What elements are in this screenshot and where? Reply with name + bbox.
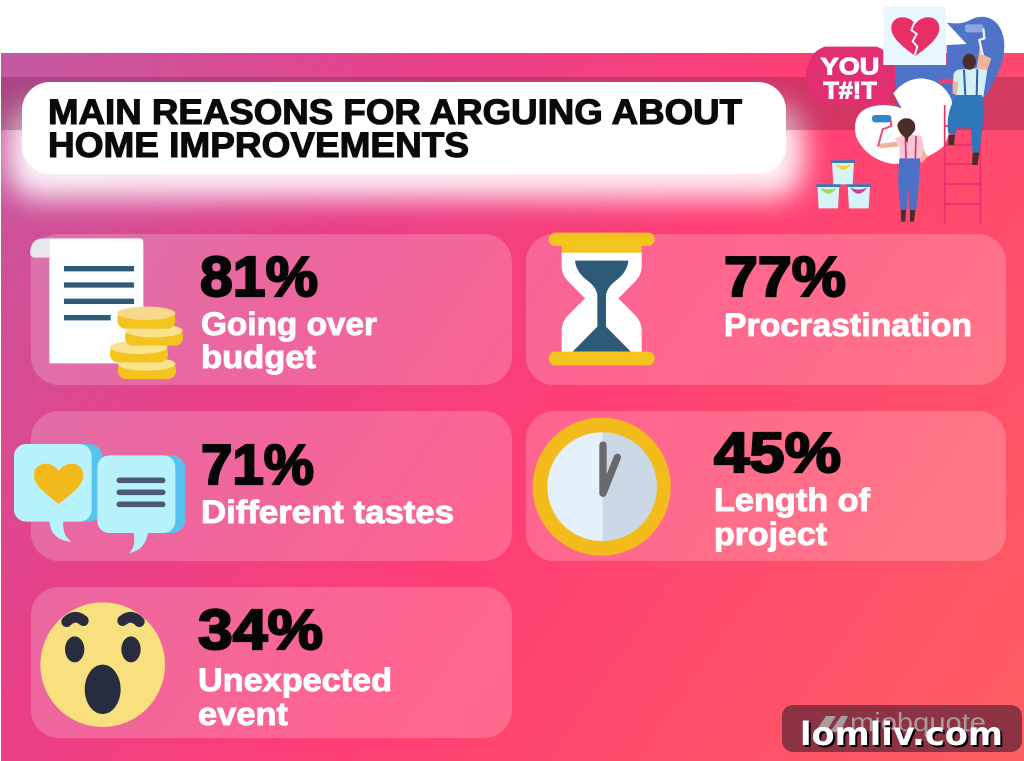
speech bubble: you	[806, 47, 902, 108]
icon: surprised face	[40, 602, 165, 727]
value 45%: 45%	[714, 421, 841, 485]
painter on ladder	[940, 24, 991, 165]
speech bubble: you: T#!T	[823, 77, 877, 104]
value 34%: 34%	[198, 598, 323, 662]
card: 71% different tastes	[14, 411, 512, 561]
label unexpected event: Unexpected	[198, 662, 392, 698]
title text: HOME IMPROVEMENTS	[48, 126, 469, 165]
paint roller blue	[965, 24, 984, 55]
speech bubble: you: YOU	[821, 54, 879, 81]
title glow	[8, 104, 804, 198]
title panel	[22, 82, 786, 174]
broken heart card	[883, 7, 946, 65]
paint cans	[816, 160, 871, 208]
label length of project: Length of	[714, 482, 870, 518]
label procrastination: Procrastination	[724, 307, 972, 343]
paint roller pink	[872, 115, 891, 147]
label unexpected event: event	[198, 696, 288, 732]
label going over budget: budget	[201, 339, 316, 375]
label going over budget: Going over	[201, 306, 377, 342]
white paint bubble	[855, 78, 952, 164]
label different tastes: Different tastes	[201, 494, 454, 530]
value 81%: 81%	[200, 245, 318, 309]
site name shadow: lomliv.com	[802, 717, 1005, 755]
icon: speech bubbles	[14, 444, 185, 553]
card: 45% length of project	[526, 411, 1006, 561]
illustration: couple painting and arguing	[806, 7, 1004, 223]
icon: clock	[533, 418, 671, 556]
icon: hourglass	[549, 233, 655, 365]
value 71%: 71%	[201, 433, 314, 497]
label length of project: project	[714, 516, 827, 552]
blue paint bubble	[895, 17, 1004, 107]
ladder	[945, 105, 980, 223]
faded logo text: mjobquote	[850, 707, 986, 737]
title text: MAIN REASONS FOR ARGUING ABOUT	[48, 93, 742, 132]
site name: lomliv.com	[800, 715, 1003, 753]
watermark badge	[782, 705, 1022, 755]
card: 77% procrastination	[526, 233, 1006, 385]
logo icon	[815, 716, 848, 732]
icon: document and coins	[30, 238, 183, 379]
painter woman	[872, 115, 927, 222]
value 77%: 77%	[724, 245, 846, 309]
header band	[1, 77, 1024, 130]
card: 81% going over budget	[30, 234, 512, 385]
card: 34% unexpected event	[31, 587, 512, 738]
